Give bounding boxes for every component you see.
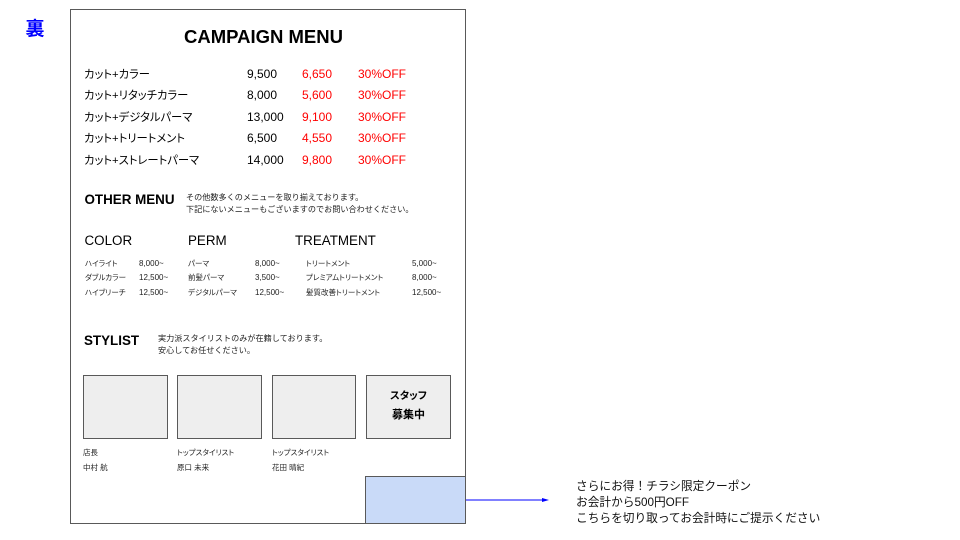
list: perm prices: パーマ [188, 259, 209, 268]
heading: stylist: STYLIST [84, 333, 139, 348]
row: cut and retouch color: 8,000 [247, 88, 277, 102]
list: treatment prices: プレミアムトリートメント [306, 273, 383, 282]
staff wanted box: スタッフ [390, 391, 427, 402]
row: cut and color: カット+カラー [84, 69, 150, 81]
heading: perm: PERM [188, 233, 227, 248]
heading: treatment: TREATMENT [295, 233, 376, 248]
row: cut and straight perm [84, 153, 406, 167]
coupon note text: さらにお得！チラシ限定クーポン [576, 480, 751, 493]
list: perm prices: 前髪パーマ [188, 273, 224, 282]
row: cut and digital perm: 9,100 [302, 110, 332, 124]
photo placeholder: manager [83, 375, 168, 439]
caption: top stylist 1 [177, 448, 234, 472]
coupon area [365, 476, 466, 524]
row: cut and treatment: 30%OFF [358, 131, 406, 145]
list: color prices: 12,500~ [139, 273, 168, 282]
photo placeholder: top stylist 1 [177, 375, 262, 439]
list: treatment prices: 8,000~ [412, 273, 437, 282]
row: cut and color [84, 67, 406, 81]
list: treatment prices: 5,000~ [412, 259, 437, 268]
coupon note text: お会計から500円OFF [576, 496, 689, 509]
list: perm prices: 12,500~ [255, 288, 284, 297]
staff wanted box: 募集中 [392, 409, 425, 421]
row: cut and digital perm: 30%OFF [358, 110, 406, 124]
text: other menu description: その他数多くのメニューを取り揃えております。 [186, 193, 363, 202]
row: cut and digital perm [84, 110, 406, 124]
row: cut and treatment: 4,550 [302, 131, 332, 145]
row: cut and retouch color: 30%OFF [358, 88, 406, 102]
row: cut and straight perm: 14,000 [247, 153, 284, 167]
heading: color: COLOR [84, 233, 132, 248]
panel: flyer sheet [70, 9, 466, 524]
row: cut and digital perm: カット+デジタルパーマ [84, 112, 192, 124]
list: color prices: ハイブリーチ [85, 288, 126, 297]
row: cut and color: 30%OFF [358, 67, 406, 81]
list: perm prices: 3,500~ [255, 273, 280, 282]
row: cut and retouch color: カット+リタッチカラー [84, 90, 188, 102]
heading: other menu: OTHER MENU [84, 192, 175, 207]
caption: top stylist 2: 花田 晴紀 [272, 463, 304, 472]
list: color prices: 8,000~ [139, 259, 164, 268]
row: cut and retouch color [84, 88, 406, 102]
row: cut and straight perm: 30%OFF [358, 153, 406, 167]
list: perm prices [188, 259, 284, 297]
caption: top stylist 1: トップスタイリスト [177, 448, 234, 457]
list: perm prices: デジタルパーマ [188, 288, 237, 297]
text: stylist description: 安心してお任せください。 [158, 346, 255, 355]
caption: manager: 中村 航 [83, 463, 108, 472]
list: color prices [85, 259, 168, 297]
staff wanted box [366, 375, 451, 439]
list: perm prices: 8,000~ [255, 259, 280, 268]
row: cut and color: 6,650 [302, 67, 332, 81]
row: cut and digital perm: 13,000 [247, 110, 284, 124]
row: cut and treatment [84, 131, 406, 145]
row: cut and retouch color: 5,600 [302, 88, 332, 102]
text: other menu description: 下記にないメニューもございますのでお問い合わせください。 [186, 205, 414, 214]
caption: top stylist 1: 原口 未来 [177, 463, 209, 472]
title: CAMPAIGN MENU [184, 26, 343, 47]
list: treatment prices [306, 259, 441, 297]
caption: top stylist 2 [272, 448, 329, 472]
text: stylist description: 実力派スタイリストのみが在籍しております。 [158, 334, 327, 343]
row: cut and color: 9,500 [247, 67, 277, 81]
list: treatment prices: 髪質改善トリートメント [306, 288, 380, 297]
side label: back of flyer: 裏 [26, 19, 45, 40]
text: other menu description [186, 193, 414, 214]
text: stylist description [158, 334, 327, 355]
arrow: coupon to note [466, 498, 549, 502]
campaign price table [84, 67, 406, 167]
coupon note text: こちらを切り取ってお会計時にご提示ください [576, 512, 820, 525]
row: cut and treatment: カット+トリートメント [84, 133, 185, 145]
list: color prices: 12,500~ [139, 288, 168, 297]
row: cut and straight perm: 9,800 [302, 153, 332, 167]
caption: top stylist 2: トップスタイリスト [272, 448, 329, 457]
list: color prices: ハイライト [85, 259, 118, 268]
photo placeholder: top stylist 2 [272, 375, 356, 439]
list: treatment prices: トリートメント [306, 259, 350, 268]
list: color prices: ダブルカラー [85, 273, 126, 282]
caption: manager [83, 448, 108, 472]
coupon note text [576, 480, 820, 525]
row: cut and treatment: 6,500 [247, 131, 277, 145]
caption: manager: 店長 [83, 448, 98, 457]
row: cut and straight perm: カット+ストレートパーマ [84, 155, 199, 167]
list: treatment prices: 12,500~ [412, 288, 441, 297]
